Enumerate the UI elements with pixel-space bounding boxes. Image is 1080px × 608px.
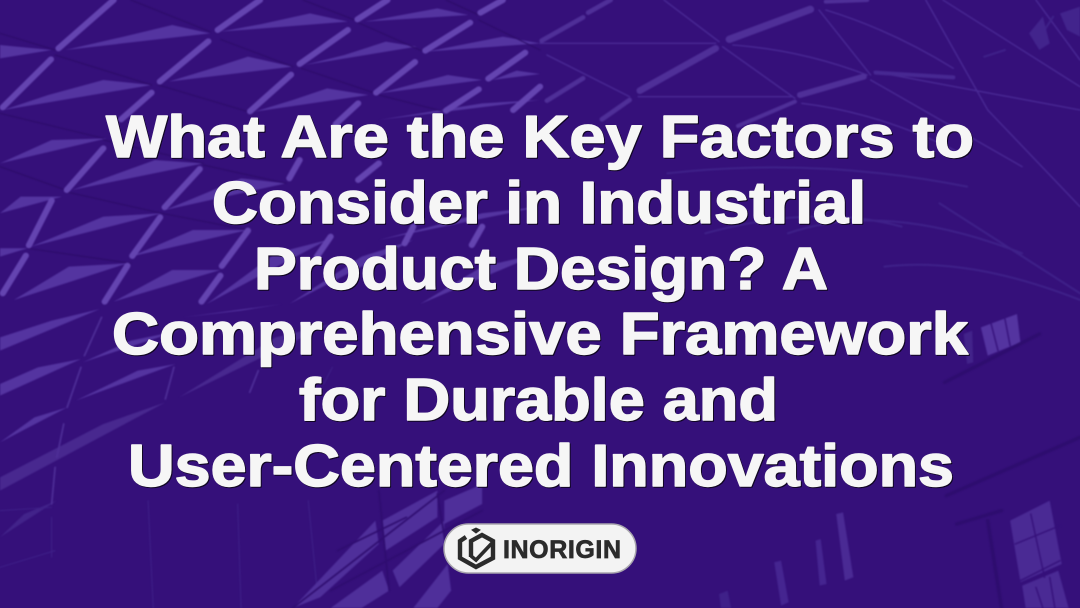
title line 1: What Are the Key Factors to xyxy=(106,104,974,170)
title line 4: Comprehensive Framework xyxy=(112,301,968,367)
logo badge: inorigin xyxy=(444,524,636,573)
icon: hexagonal cube mark xyxy=(460,528,493,567)
logo wordmark: INORIGIN xyxy=(503,536,621,564)
badge pill xyxy=(444,524,636,573)
title line 2: Consider in Industrial xyxy=(212,170,866,236)
title line 3: Product Design? A xyxy=(254,236,828,302)
title line 6: User-Centered Innovations xyxy=(128,433,954,499)
title: six centred lines xyxy=(106,104,974,499)
title line 5: for Durable and xyxy=(299,367,778,433)
